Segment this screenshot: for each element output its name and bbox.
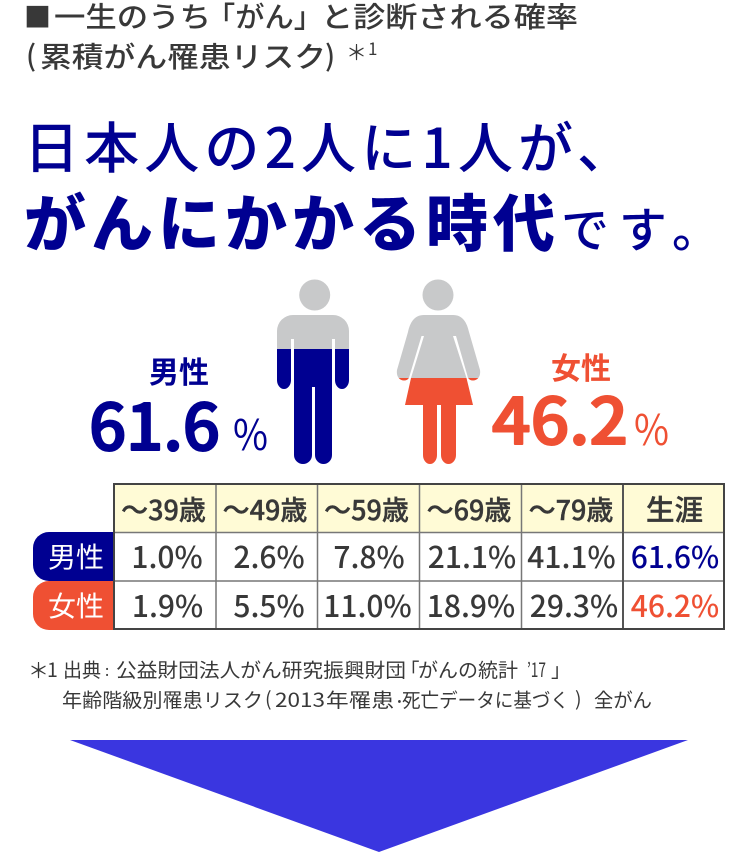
footnote <box>28 654 652 713</box>
footnote: : <box>105 660 109 681</box>
male row values: 1.0% <box>131 533 203 577</box>
footnote: · <box>395 691 404 712</box>
female statistic: 46.2 <box>492 371 628 463</box>
footnote: 出典 <box>63 654 101 683</box>
male statistic: % <box>233 402 268 463</box>
data table <box>33 484 724 630</box>
male statistic: 61.6 <box>89 377 220 469</box>
table header row: 〜49歳 <box>223 489 307 528</box>
female row label <box>33 581 114 630</box>
female statistic: % <box>634 397 669 458</box>
footnote: 死亡データに基づく <box>402 684 569 713</box>
male row values: 21.1% <box>428 533 516 577</box>
table header row <box>114 484 724 532</box>
female statistic: 女性 <box>551 344 611 388</box>
male row values: 7.8% <box>333 533 405 577</box>
section heading: 累積がん罹患リスク <box>40 35 326 76</box>
section heading: ( <box>26 34 36 75</box>
footnote: ’17 <box>527 654 546 683</box>
section heading <box>24 0 578 76</box>
female row values: 5.5% <box>233 582 305 626</box>
headline: がんにかかる時代 <box>24 174 555 264</box>
section heading: ) <box>325 34 335 75</box>
female row values: 29.3% <box>530 582 618 626</box>
female statistic <box>492 344 669 463</box>
female row values: 18.9% <box>427 582 515 626</box>
male row values: 2.6% <box>233 533 305 577</box>
female row label: 女性 <box>48 585 104 625</box>
table header row: 〜59歳 <box>324 489 409 528</box>
footnote: 年罹患 <box>326 684 394 713</box>
table header row: 〜79歳 <box>529 489 613 528</box>
female figure <box>397 280 480 464</box>
footnote: 全がん <box>594 684 652 713</box>
table header row: 〜39歳 <box>121 489 206 528</box>
footnote: 年齢階級別罹患リスク <box>62 684 263 713</box>
female row values: 1.9% <box>132 582 203 626</box>
section heading: 1 <box>368 35 377 60</box>
footnote: がんの統計 <box>418 654 518 683</box>
female row values: 46.2% <box>631 582 719 626</box>
male row values: 41.1% <box>527 533 616 577</box>
footnote: 」 <box>551 654 571 683</box>
headline: 日本人の2人に1人が、 <box>24 104 632 184</box>
footnote: ( <box>265 683 272 712</box>
headline <box>24 104 720 264</box>
male row values <box>131 533 719 577</box>
arrow down <box>70 740 688 852</box>
male figure <box>277 280 349 464</box>
footnote: ＊ <box>28 655 49 685</box>
footnote: 「 <box>400 654 420 683</box>
headline: です。 <box>561 191 720 261</box>
footnote: 1 <box>47 654 58 683</box>
female row values <box>132 582 719 626</box>
male row values: 61.6% <box>631 533 719 577</box>
footnote: ) <box>575 683 582 712</box>
male statistic <box>89 348 268 469</box>
footnote: 2013 <box>275 684 325 713</box>
section heading: ＊ <box>346 37 367 67</box>
table grid <box>114 484 724 629</box>
male row label <box>33 532 114 581</box>
table header row: 〜69歳 <box>427 489 511 528</box>
female row values: 11.0% <box>323 582 412 626</box>
male row label: 男性 <box>48 536 104 576</box>
male statistic: 男性 <box>149 348 209 392</box>
footnote: 公益財団法人がん研究振興財団 <box>116 654 406 683</box>
table header row: 生涯 <box>646 488 703 529</box>
